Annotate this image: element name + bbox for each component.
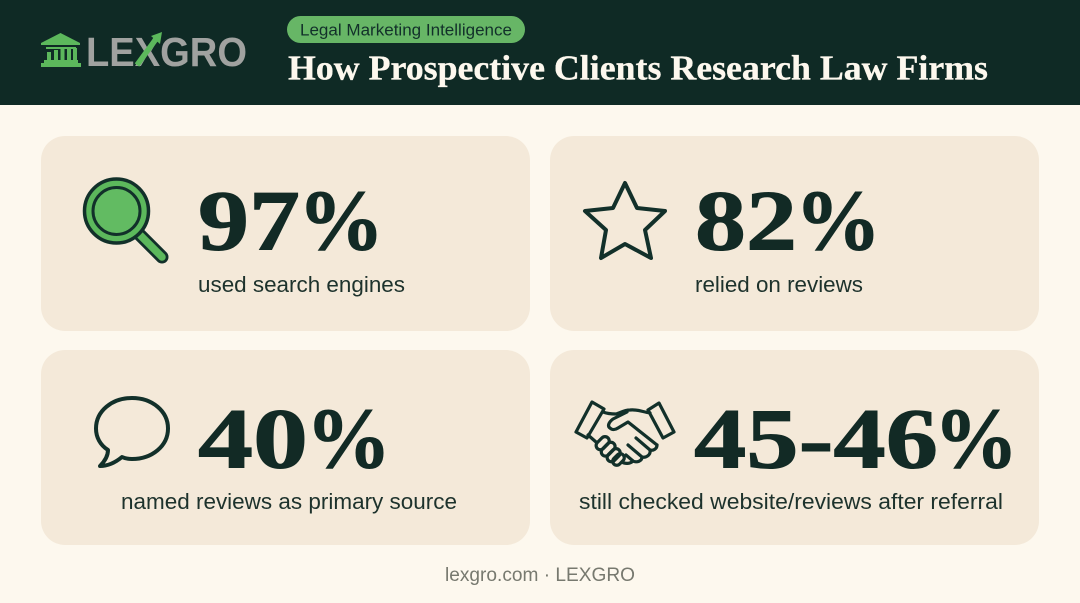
badge: Legal Marketing Intelligence	[287, 16, 525, 43]
label: used search engines: used search engines	[198, 272, 405, 297]
stat: 97%: 97	[198, 172, 300, 268]
logo: LEXGRO	[41, 29, 247, 75]
stat: 40%: %	[306, 390, 391, 486]
stat: 40%	[198, 390, 391, 486]
stat: 45-46%: 45-46	[694, 390, 938, 486]
panel: still checked website/reviews after referral	[550, 350, 1039, 545]
panel: used search engines	[41, 136, 530, 331]
badge: Legal Marketing Intelligence: Legal Marketing Intelligence	[300, 20, 512, 40]
stat: 40%: 40	[198, 390, 308, 486]
footer: lexgro.com · LEXGRO	[445, 564, 635, 586]
label: relied on reviews: relied on reviews	[695, 272, 863, 297]
stat: 45-46%: %	[934, 390, 1018, 486]
stat: 82%: %	[795, 172, 881, 268]
icon: magnifying glass	[84, 179, 162, 257]
panel: named reviews as primary source	[41, 350, 530, 545]
stat: 45-46%	[694, 390, 1018, 486]
stat: 97%	[198, 172, 384, 268]
stat: 82%	[695, 172, 881, 268]
title: How Prospective Clients Research Law Firms	[288, 48, 988, 88]
icon: handshake	[576, 402, 674, 467]
wordmark: LEXGRO	[86, 29, 247, 75]
header band	[0, 0, 1080, 105]
icon: bank building with bars	[41, 33, 81, 67]
panel: relied on reviews	[550, 136, 1039, 331]
stat: 82%: 82	[695, 172, 797, 268]
icon: star outline	[585, 183, 665, 258]
stat: 97%: %	[298, 172, 384, 268]
label: still checked website/reviews after referral: still checked website/reviews after referral	[579, 489, 1003, 514]
icon: growth arrow through X	[137, 32, 162, 65]
icon: speech bubble	[96, 398, 168, 466]
label: named reviews as primary source: named reviews as primary source	[121, 489, 457, 514]
